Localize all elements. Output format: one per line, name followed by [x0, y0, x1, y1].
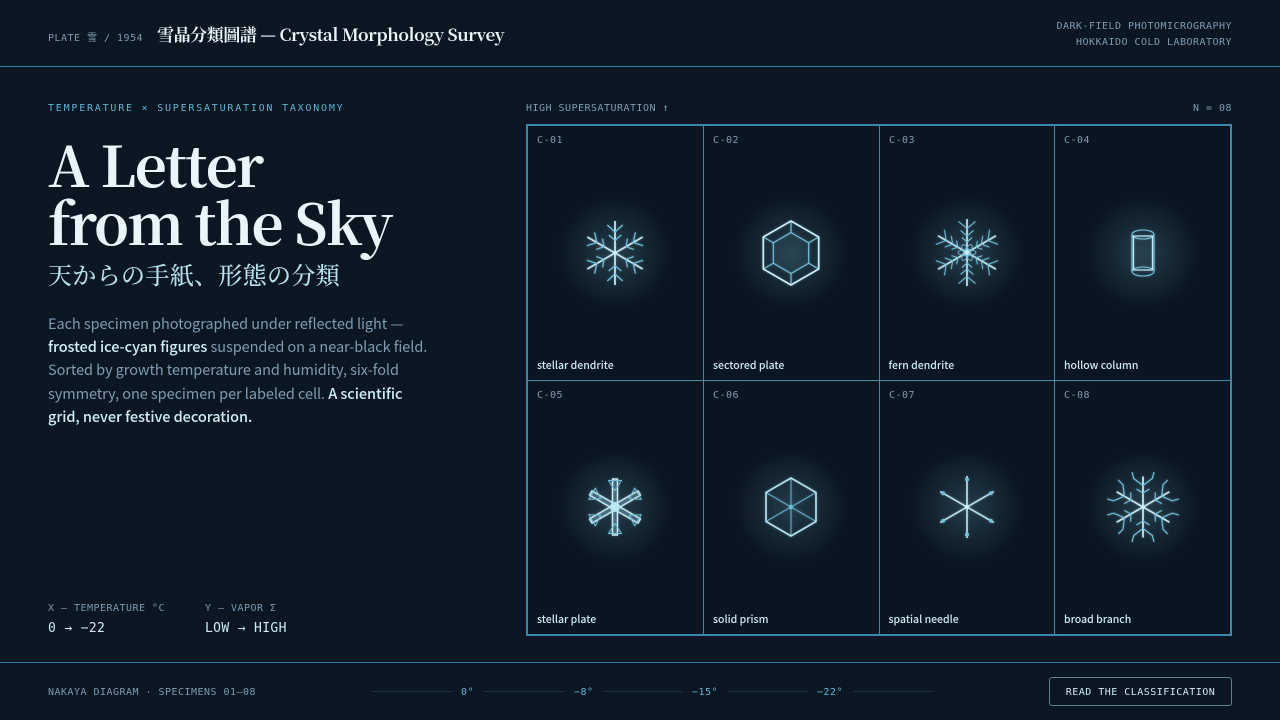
eyebrow: TEMPERATURE × SUPERSATURATION TAXONOMY: [48, 103, 344, 114]
footer label: NAKAYA DIAGRAM · SPECIMENS 01–08: [48, 687, 256, 698]
name 3: fern dendrite: [888, 358, 954, 373]
grid caption right: N = 08: [1193, 103, 1232, 114]
name 6: solid prism: [713, 612, 769, 627]
description: frosted ice-cyan figures suspended on a near-black field.: [48, 336, 427, 357]
button: read the classification: [1049, 677, 1232, 706]
icon: broad branch: [1085, 449, 1201, 565]
description: Sorted by growth temperature and humidity, six-fold: [48, 359, 399, 380]
specimen grid: [526, 124, 1232, 636]
axis y: [205, 603, 287, 636]
axis y: Y — VAPOR Σ: [205, 603, 277, 614]
axis x: X — TEMPERATURE °C: [48, 603, 165, 614]
id 2: C-02: [713, 135, 739, 146]
icon: stellar plate: [557, 449, 673, 565]
temperature scale: −15°: [692, 687, 718, 698]
main heading: [48, 124, 394, 262]
id 7: C-07: [889, 390, 915, 401]
temperature scale: −8°: [574, 687, 594, 698]
id 5: C-05: [537, 390, 563, 401]
header: [48, 21, 1232, 48]
icon: hollow column: [1085, 195, 1201, 311]
name 7: spatial needle: [888, 612, 959, 627]
id 4: C-04: [1064, 135, 1090, 146]
description: [48, 313, 427, 427]
description: Each specimen photographed under reflected light —: [48, 313, 403, 334]
name 8: broad branch: [1064, 612, 1131, 627]
icon: solid prism: [733, 449, 849, 565]
icon: stellar dendrite: [557, 195, 673, 311]
axis x: [48, 603, 165, 636]
header meta: DARK-FIELD PHOTOMICROGRAPHY: [1056, 21, 1232, 32]
cell labels: [537, 135, 1138, 627]
id 6: C-06: [713, 390, 739, 401]
axis x: 0 → −22: [48, 621, 105, 636]
description: symmetry, one specimen per labeled cell. A scientific: [48, 383, 402, 404]
name 1: stellar dendrite: [537, 358, 614, 373]
name 4: hollow column: [1064, 358, 1138, 373]
icon: spatial needle: [909, 449, 1025, 565]
header meta: [1056, 21, 1232, 48]
header title: 雪晶分類圖譜 — Crystal Morphology Survey: [157, 21, 504, 46]
temperature scale: −22°: [817, 687, 843, 698]
id 1: C-01: [537, 135, 563, 146]
id 3: C-03: [889, 135, 915, 146]
footer: [48, 677, 1232, 706]
main heading: A Letter: [48, 124, 262, 204]
plate label: PLATE 雪 / 1954: [48, 33, 143, 44]
description: grid, never festive decoration.: [48, 406, 252, 427]
icon: sectored plate: [733, 195, 849, 311]
grid caption left: HIGH SUPERSATURATION ↑: [526, 103, 669, 114]
name 2: sectored plate: [713, 358, 784, 373]
temperature scale: 0°: [461, 687, 474, 698]
japanese subtitle: 天からの手紙、形態の分類: [48, 256, 340, 291]
left column: [48, 103, 427, 636]
header meta: HOKKAIDO COLD LABORATORY: [1076, 37, 1232, 48]
temperature scale: [372, 687, 933, 698]
main heading: from the Sky: [48, 182, 392, 262]
id 8: C-08: [1064, 390, 1090, 401]
axis y: LOW → HIGH: [205, 621, 287, 636]
name 5: stellar plate: [537, 612, 596, 627]
icon: fern dendrite: [909, 194, 1025, 310]
button: read the classification: READ THE CLASSIFICATION: [1066, 687, 1215, 698]
